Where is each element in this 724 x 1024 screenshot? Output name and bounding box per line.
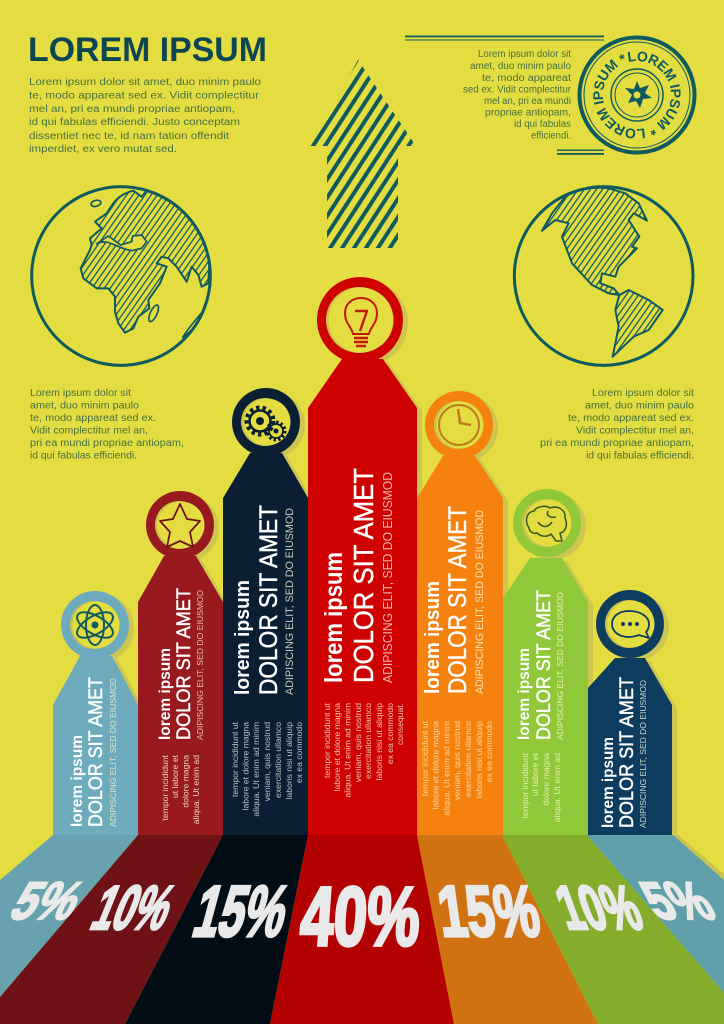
column: 15% clock: ADIPISCING ELIT, SED DO EIUSMOD (474, 510, 486, 694)
column: 10% brain (503, 489, 588, 838)
percentage labels: 5% (1, 871, 94, 930)
mid-right paragraph: pri ea mundi propriae antiopam, (540, 438, 694, 449)
title: LOREM IPSUM (28, 31, 267, 69)
column: 15% clock: aliqua. Ut enim ad minim (442, 721, 452, 816)
intro paragraph: id qui fabulas efficiendi. Justo conceptam (29, 117, 240, 128)
icon: speech bubble (612, 611, 649, 638)
column shadows (58, 280, 677, 838)
percentage labels: 10% (83, 873, 185, 942)
perspective floor bands (0, 835, 724, 1024)
mid-right paragraph: id qui fabulas efficiendi. (586, 450, 694, 462)
right globe: Americas (514, 187, 693, 365)
column: 5% atom: lorem ipsum (69, 735, 86, 827)
column: 5% speech bubble: DOLOR SIT AMET (616, 677, 638, 828)
top-right rules and paragraph: Lorem ipsum dolor sit (478, 49, 571, 60)
column: 10% brain: lorem ipsum (516, 648, 533, 740)
column: 40% bulb: lorem ipsum (320, 552, 348, 683)
column: 15% gears: DOLOR SIT AMET (255, 505, 283, 695)
left globe: Europe and Africa (32, 187, 210, 365)
top-right rules and paragraph: mel an, pri ea mundi (484, 96, 571, 107)
percentage labels (1, 870, 724, 963)
column: 15% gears: aliqua. Ut enim ad minim (251, 722, 261, 817)
column: 15% gears: ADIPISCING ELIT, SED DO EIUSMOD (284, 508, 296, 695)
column: 10% brain: dolore magna (541, 753, 551, 806)
striped up arrow (310, 60, 416, 248)
top-right rules and paragraph: id qui fabulas (514, 119, 571, 130)
column: 10% star: lorem ipsum (157, 648, 174, 740)
icon: star (160, 504, 200, 547)
column: 40% bulb: exercitation ullamco (363, 703, 373, 779)
stamp badge: LOREM IPSUM * LOREM IPSUM * (593, 52, 681, 138)
column: 40% bulb: DOLOR SIT AMET (348, 468, 379, 683)
column: 15% gears: exercitation ullamco (273, 722, 283, 798)
column: 10% brain: tempor incididunt (520, 752, 530, 818)
column: 5% speech bubble: ADIPISCING ELIT, SED DO EIUSMOD (638, 680, 648, 828)
column: 10% brain: aliqua. Ut enim ad (552, 753, 562, 822)
mid-right paragraph: Vidit complectitur mel an, (576, 426, 694, 436)
column: 10% star: ADIPISCING ELIT, SED DO EIUSMOD (195, 590, 205, 740)
percentage labels: 15% (433, 872, 544, 952)
column: 10% brain: DOLOR SIT AMET (533, 590, 555, 740)
icon: atom (73, 605, 117, 645)
icon: brain (527, 506, 566, 541)
column: 15% gears: ex ea commodo (294, 722, 304, 783)
mid-right paragraph: amet, duo minim paulo (585, 400, 694, 412)
column: 10% star: aliqua. Ut enim ad (191, 755, 201, 824)
column: 15% gears: laboris nisi ut aliquip (284, 722, 294, 799)
column: 15% gears: lorem ipsum (232, 580, 254, 695)
top-right rules and paragraph: efficiendi. (531, 130, 571, 142)
column: 10% star (138, 491, 223, 838)
column: 15% clock: DOLOR SIT AMET (444, 506, 472, 694)
column: 15% clock: labore et dolore magna (430, 721, 440, 809)
intro paragraph: imperdiet, ex vero mutat sed. (29, 144, 177, 155)
intro paragraph: te, modo appareat sed ex. Vidit complectitur (29, 90, 260, 102)
column: 10% star: dolore magna (180, 755, 190, 808)
column: 40% bulb: laboris nisi ut aliquip (374, 703, 384, 780)
top-right rules and paragraph: amet, duo minim paulo (470, 61, 571, 72)
mid-left paragraph: Lorem ipsum dolor sit (30, 388, 131, 399)
top-right rules and paragraph: te, modo appareat (482, 73, 571, 84)
column: 40% bulb: tempor incididunt ut (322, 702, 332, 778)
intro paragraph: dissentiet nec te, id nam tation offendit (29, 131, 229, 142)
column: 10% star: tempor incididunt (160, 754, 170, 820)
column: 15% gears (223, 388, 308, 838)
column: 15% clock: ex ea commodo (484, 721, 494, 782)
column: 10% star: DOLOR SIT AMET (173, 588, 195, 740)
column: 5% atom: ADIPISCING ELIT, SED DO EIUSMOD (108, 678, 118, 827)
column: 5% speech bubble: lorem ipsum (600, 737, 617, 828)
intro paragraph (29, 77, 262, 155)
mid-left paragraph: Vidit complectitur mel an, (30, 426, 148, 436)
column: 40% bulb (308, 277, 417, 838)
column: 40% bulb: aliqua. Ut enim ad minim (342, 703, 352, 798)
percentage labels: 40% (298, 870, 423, 963)
column: 15% clock: laboris nisi ut aliquip (474, 721, 484, 798)
mid-left paragraph: te, modo appareat sed ex. (30, 413, 156, 424)
column: 5% speech bubble (588, 590, 672, 838)
column: 15% clock: exercitation ullamco (463, 721, 473, 797)
column: 40% bulb: labore et dolore magna (332, 703, 342, 791)
column: 40% bulb: consequat. (395, 703, 405, 745)
mid-left paragraph: pri ea mundi propriae antiopam, (30, 438, 184, 449)
intro paragraph: mel an, pri ea mundi propriae antiopam, (29, 104, 235, 115)
icon: gears (246, 408, 285, 440)
mid-right paragraph: Lorem ipsum dolor sit (592, 388, 694, 399)
column: 15% gears: veniam, quis nostrud (262, 722, 272, 801)
column: 15% gears: tempor incididunt ut (230, 721, 240, 797)
mid-right paragraph: te, modo appareat sed ex. (568, 413, 694, 424)
percentage labels: 15% (186, 871, 297, 952)
column: 15% clock: veniam, quis nostrud (452, 721, 462, 800)
column: 15% clock (417, 391, 503, 838)
column: 10% brain: ADIPISCING ELIT, SED DO EIUSMOD (555, 592, 565, 740)
top-right rules and paragraph: sed ex. Vidit complectitur (463, 84, 572, 96)
top-right rules and paragraph (405, 36, 604, 155)
mid-left paragraph: id qui fabulas efficiendi. (30, 450, 137, 462)
percentage labels: 10% (547, 873, 651, 943)
column: 10% star: ut labore et (170, 754, 180, 798)
icon: clock (439, 405, 479, 445)
column: 40% bulb: ADIPISCING ELIT, SED DO EIUSMOD (380, 472, 395, 683)
column: 15% clock: tempor incididunt ut (420, 720, 430, 796)
mid-right paragraph (540, 388, 694, 462)
column: 15% gears: labore et dolore magna (240, 722, 250, 810)
icon: light bulb (345, 298, 377, 346)
top-right rules and paragraph: propriae antiopam, (485, 108, 571, 118)
column: 15% clock: lorem ipsum (422, 581, 444, 694)
mid-left paragraph (30, 388, 184, 462)
column: 10% brain: ut labore et (530, 752, 540, 796)
stamp badge (578, 36, 696, 154)
column: 40% bulb: ex ea commodo (385, 703, 395, 764)
column: 5% atom: DOLOR SIT AMET (85, 677, 107, 827)
column: 40% bulb: veniam, quis nostrud (353, 703, 363, 782)
intro paragraph: Lorem ipsum dolor sit amet, duo minim paulo (29, 77, 262, 88)
column: 5% atom (53, 591, 138, 838)
mid-left paragraph: amet, duo minim paulo (30, 400, 139, 412)
